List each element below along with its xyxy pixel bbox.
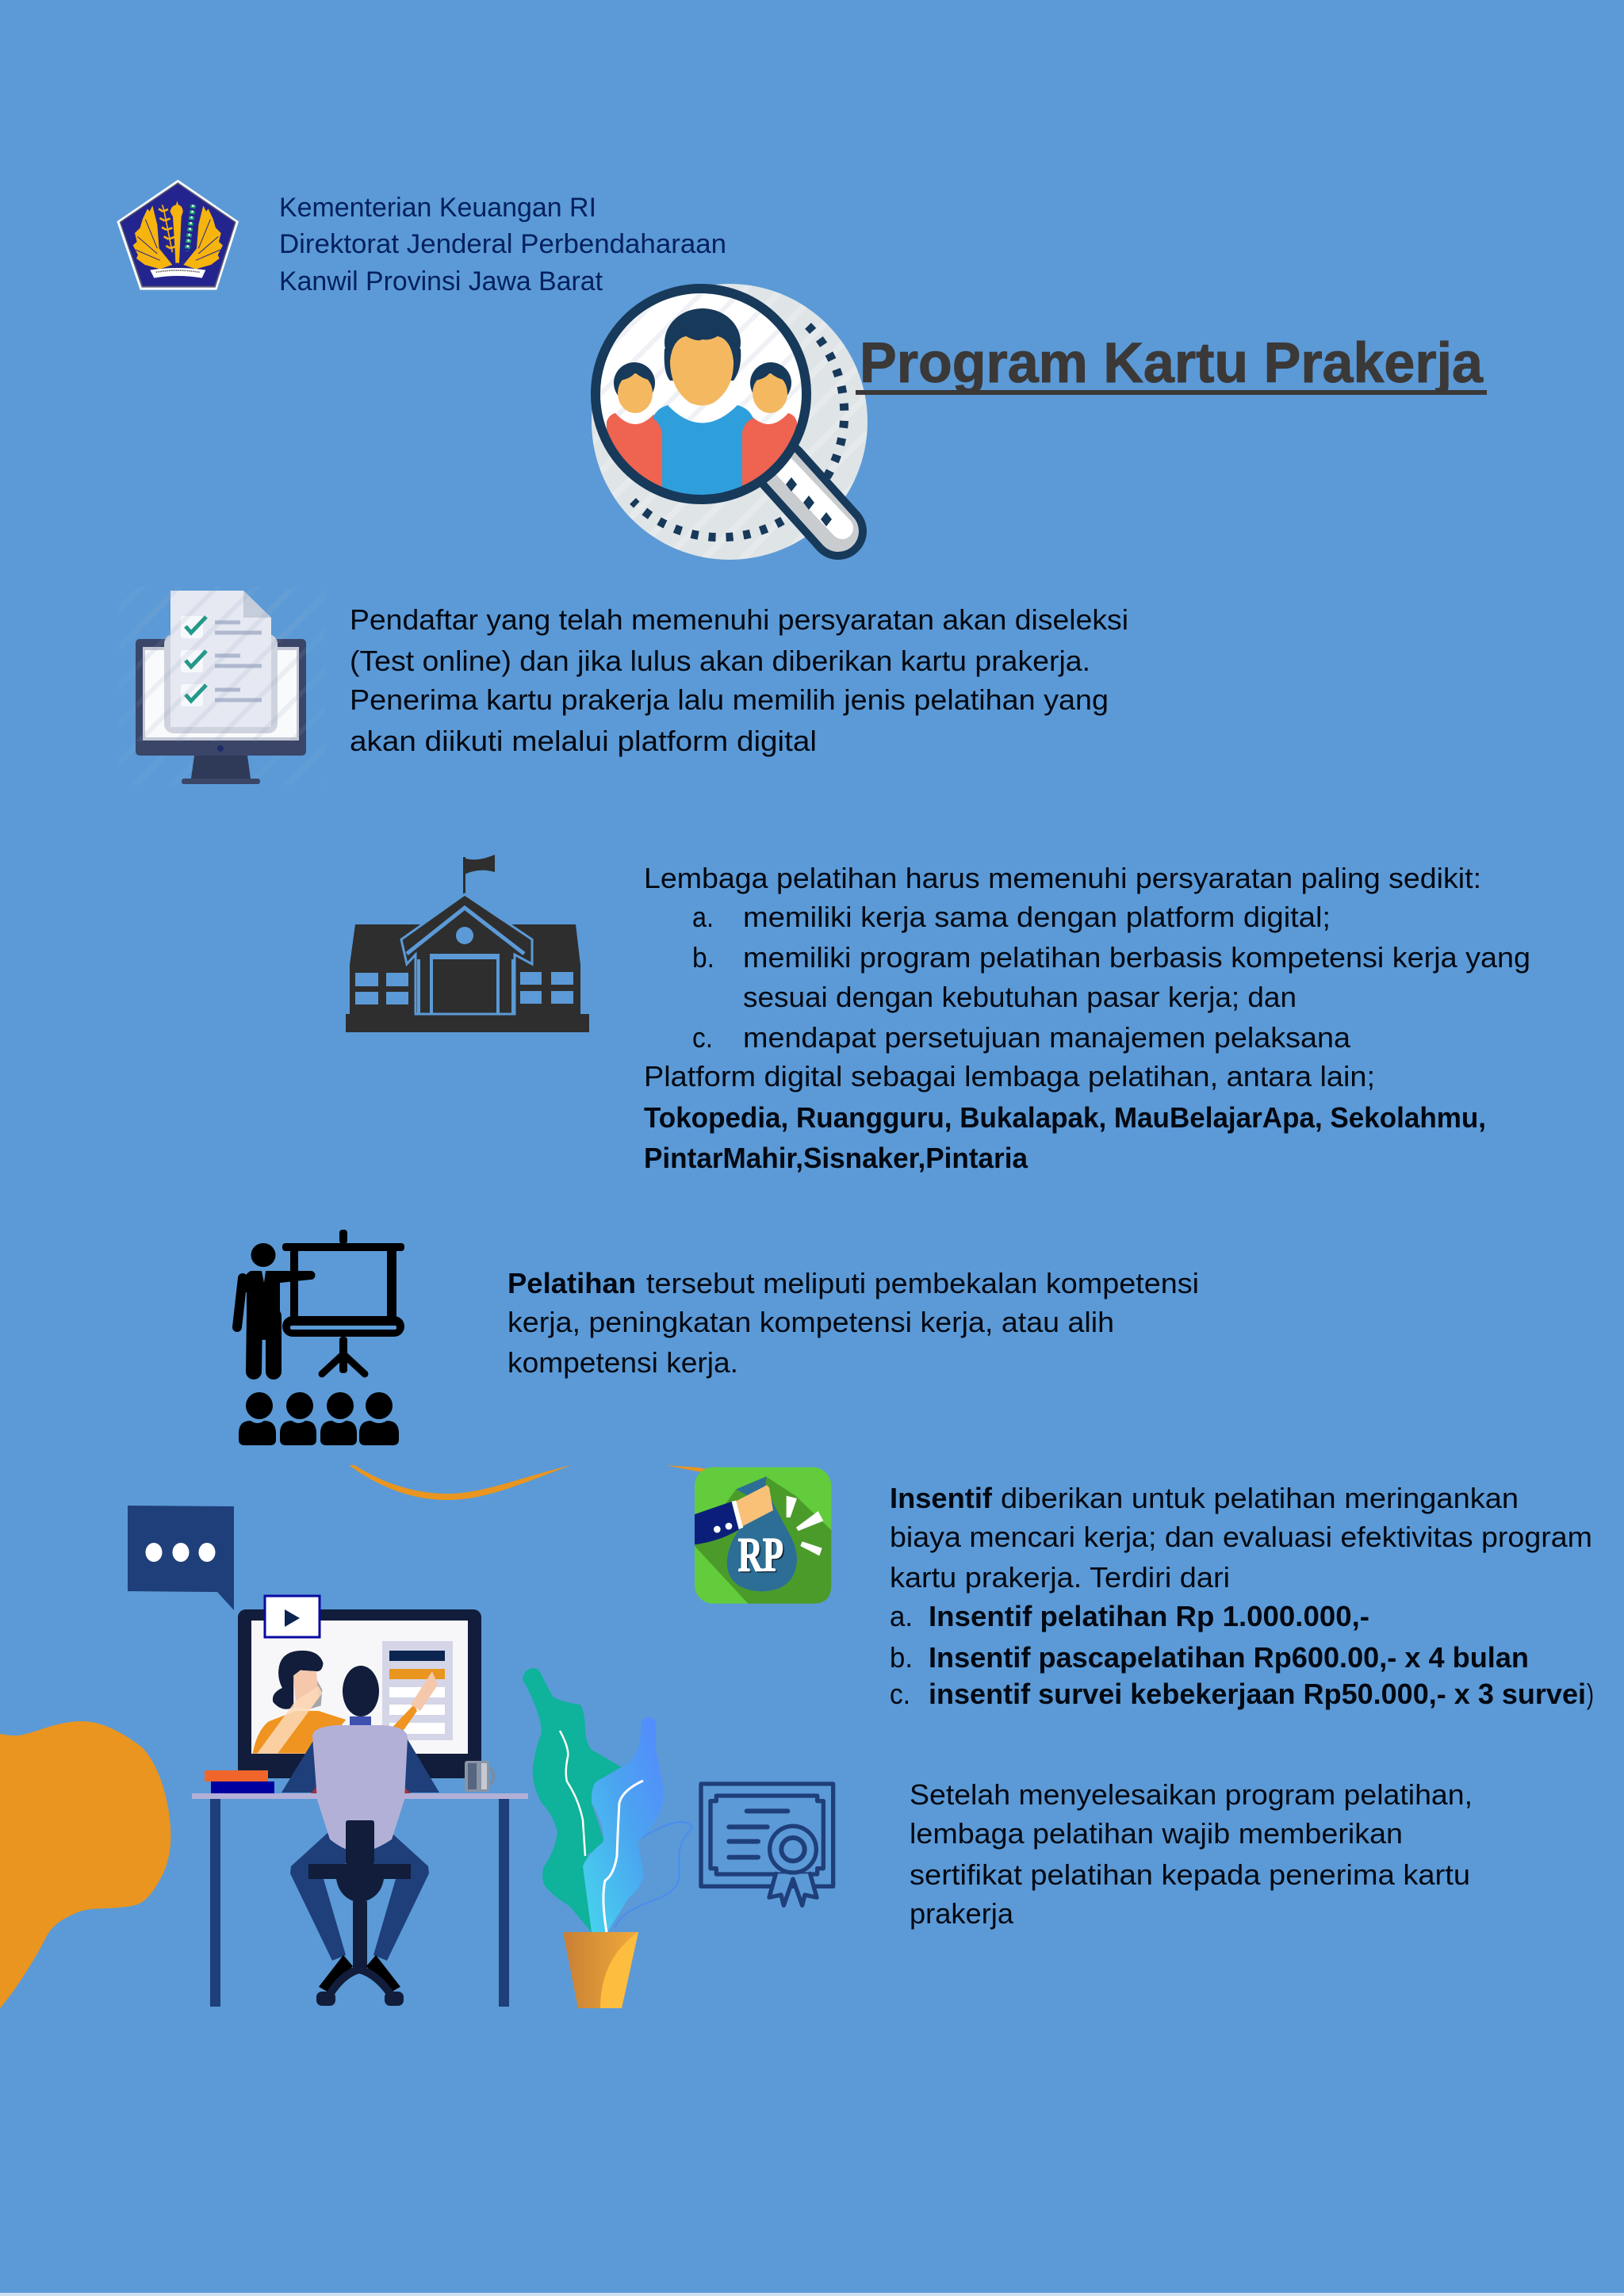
text: incentive: kartu prakerja. Terdiri dari bbox=[890, 1561, 1230, 1594]
decoration: orange curve bbox=[349, 1465, 726, 1500]
text: certificate: lembaga pelatihan wajib memberikan bbox=[910, 1817, 1403, 1850]
text: registration: akan diikuti melalui platform digital bbox=[350, 725, 817, 757]
icon: magnifier with people bbox=[592, 284, 868, 560]
text: training: kompetensi kerja. bbox=[508, 1346, 738, 1379]
text: training institution: b. bbox=[692, 941, 714, 974]
text: training institution: c. bbox=[692, 1021, 713, 1054]
text: training institution: a. bbox=[692, 901, 714, 933]
icon: ministry logo bbox=[117, 180, 239, 290]
decoration: orange blob bbox=[0, 1721, 170, 2008]
icon: school building bbox=[346, 855, 589, 1032]
header text: institution bbox=[279, 193, 726, 297]
text: certificate: prakerja bbox=[910, 1897, 1014, 1930]
text: training bbox=[508, 1267, 1199, 1379]
text: registration: Penerima kartu prakerja lalu memilih jenis pelatihan yang bbox=[350, 683, 1109, 716]
header text: institution: Kementerian Keuangan RI bbox=[279, 193, 596, 223]
text: training institution: sesuai dengan kebutuhan pasar kerja; dan bbox=[743, 981, 1297, 1013]
text: incentive: a. bbox=[890, 1600, 913, 1632]
text: incentive: Insentif pascapelatihan Rp600.00,- x 4 bulan bbox=[929, 1641, 1529, 1674]
text: training institution: memiliki kerja sama dengan platform digital; bbox=[743, 901, 1331, 933]
text: training: Pelatihan bbox=[508, 1267, 636, 1299]
text: registration: Pendaftar yang telah memenuhi persyaratan akan diseleksi bbox=[350, 603, 1128, 636]
text: registration bbox=[350, 603, 1128, 757]
text: incentive: ) bbox=[1587, 1678, 1594, 1710]
text: certificate bbox=[910, 1778, 1473, 1930]
text: incentive: b. bbox=[890, 1641, 913, 1674]
text: training institution: Lembaga pelatihan harus memenuhi persyaratan paling sedikit: bbox=[644, 862, 1481, 894]
icon: money bag RP: RP bbox=[740, 1530, 785, 1584]
text: training institution: memiliki program pelatihan berbasis kompetensi kerja yang bbox=[743, 941, 1530, 974]
illustration: potted plant bbox=[523, 1668, 692, 2008]
text: training: tersebut meliputi pembekalan kompetensi bbox=[646, 1267, 1199, 1299]
icon: money bag RP: RP bbox=[738, 1529, 783, 1582]
icon: speech bubble bbox=[128, 1506, 234, 1610]
text: incentive: Insentif bbox=[890, 1482, 993, 1514]
text: incentive: insentif survei kebekerjaan Rp50.000,- x 3 survei bbox=[929, 1678, 1586, 1710]
text: training: kerja, peningkatan kompetensi kerja, atau alih bbox=[508, 1306, 1114, 1338]
icon: monitor with checklist bbox=[119, 587, 325, 785]
text: training institution bbox=[644, 862, 1530, 1174]
text: incentive: c. bbox=[890, 1678, 910, 1710]
text: incentive: Insentif pelatihan Rp 1.000.000,- bbox=[929, 1600, 1369, 1632]
text: incentive bbox=[890, 1482, 1594, 1710]
text: certificate: sertifikat pelatihan kepada penerima kartu bbox=[910, 1858, 1470, 1891]
icon: certificate bbox=[701, 1784, 833, 1905]
text: training institution: Tokopedia, Ruangguru, Bukalapak, MauBelajarApa, Sekolahmu, bbox=[644, 1101, 1486, 1134]
text: training institution: PintarMahir,Sisnaker,Pintaria bbox=[644, 1142, 1028, 1174]
text: incentive: diberikan untuk pelatihan meringankan bbox=[1001, 1482, 1519, 1514]
illustration: online learning at desk bbox=[192, 1596, 528, 2007]
text: registration: (Test online) dan jika lulus akan diberikan kartu prakerja. bbox=[350, 645, 1090, 677]
text: training institution: mendapat persetujuan manajemen pelaksana bbox=[743, 1021, 1351, 1054]
icon: money bag RP bbox=[695, 1468, 831, 1604]
text: certificate: Setelah menyelesaikan program pelatihan, bbox=[910, 1778, 1473, 1811]
title: Program Kartu Prakerja bbox=[860, 332, 1484, 395]
icon: trainer and audience bbox=[237, 1230, 404, 1445]
text: incentive: biaya mencari kerja; dan evaluasi efektivitas program bbox=[890, 1521, 1592, 1553]
header text: institution: Direktorat Jenderal Perbendaharaan bbox=[279, 229, 726, 259]
header text: institution: Kanwil Provinsi Jawa Barat bbox=[279, 266, 603, 297]
text: training institution: Platform digital sebagai lembaga pelatihan, antara lain; bbox=[644, 1060, 1375, 1093]
